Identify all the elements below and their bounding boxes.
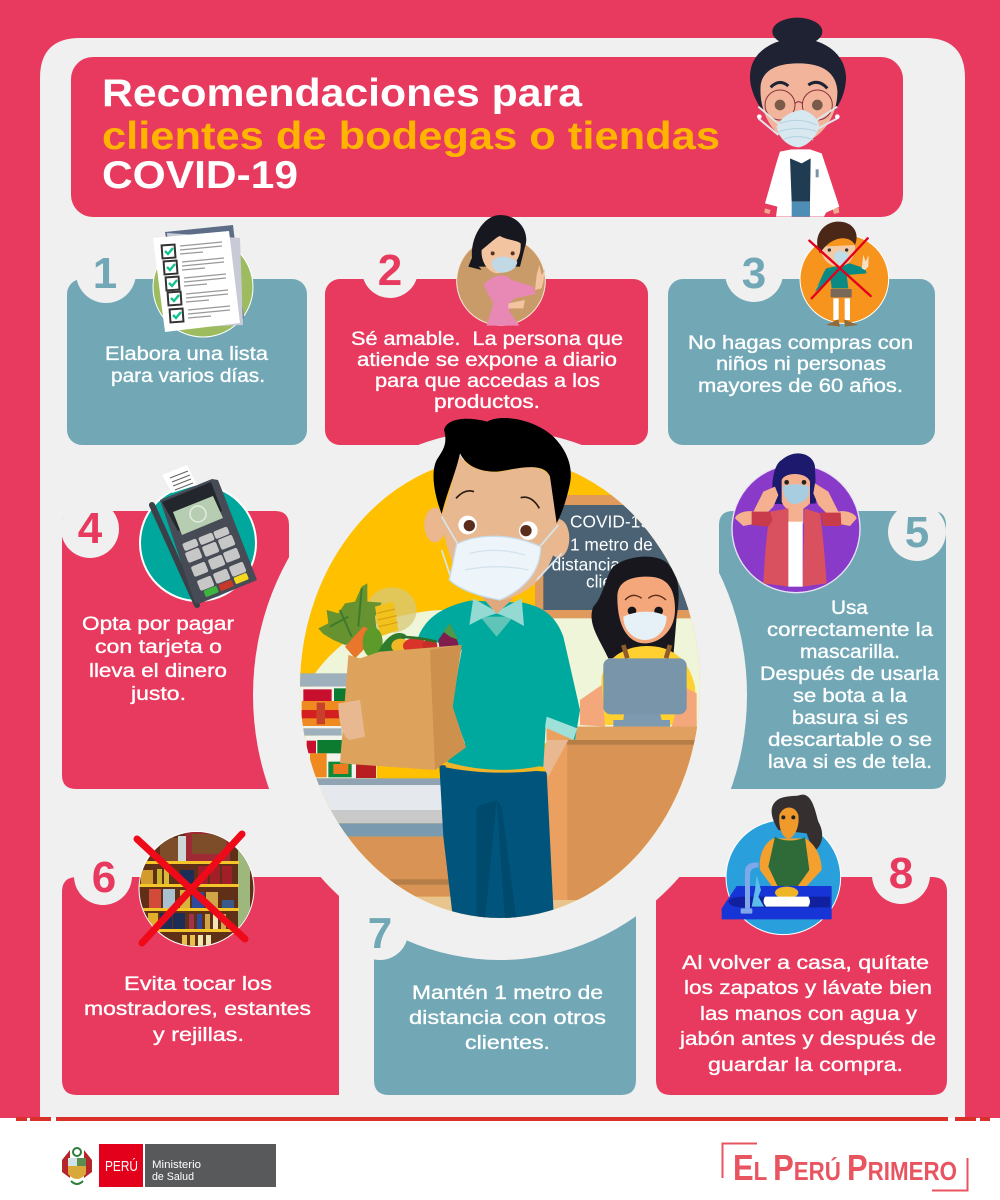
cashier <box>580 557 697 727</box>
badge 5 <box>888 503 946 561</box>
icon: store shelves crossed out <box>137 831 255 947</box>
text: step 4: con tarjeta o <box>95 637 222 658</box>
face mask <box>442 517 562 600</box>
logo: Ministerio de Salud <box>62 1144 276 1187</box>
badge 8: 8 <box>889 849 913 898</box>
text: step 5: basura si es <box>792 708 908 729</box>
text: step 8: las manos con agua y <box>700 1004 918 1025</box>
store wall <box>315 610 710 743</box>
text: step 4: Opta por pagar <box>82 614 235 635</box>
badge 7: 7 <box>368 909 392 958</box>
chalkboard sign: 1 metro de <box>570 535 653 555</box>
text: step 1: para varios días. <box>111 366 265 387</box>
text: step 5: lava si es de tela. <box>768 752 932 773</box>
chalkboard sign: distancia <box>552 555 620 575</box>
chalkboard sign: COVID-19 <box>570 511 650 531</box>
text: step 8 <box>679 953 936 1076</box>
panel: step 2 <box>325 279 648 445</box>
title text <box>102 72 720 197</box>
grocery bag <box>340 645 466 770</box>
text: step 1 <box>105 344 268 387</box>
text: step 8: guardar la compra. <box>708 1055 903 1076</box>
text: step 5: Usa <box>831 598 868 619</box>
text: step 7: Mantén 1 metro de <box>412 983 603 1004</box>
text: step 7 <box>409 983 606 1054</box>
icon: card terminal <box>140 465 257 605</box>
title text: Recomendaciones para <box>102 72 582 115</box>
icon: kind woman <box>457 215 545 326</box>
logo: Ministerio de Salud: Ministerio <box>152 1159 201 1171</box>
badge 2 <box>362 242 418 298</box>
logo: El Perú Primero: EL PERÚ PRIMERO <box>733 1147 957 1188</box>
hand <box>338 700 365 740</box>
badge 7 <box>352 904 408 960</box>
badge 4 <box>61 500 119 558</box>
eyes <box>456 491 539 540</box>
text: step 4: justo. <box>130 684 186 705</box>
text: step 5: correctamente la <box>767 620 933 641</box>
icon: boy crossed out <box>800 222 889 327</box>
badge 1 <box>76 243 136 303</box>
text: step 1: Elabora una lista <box>105 344 268 365</box>
badge 6 <box>74 847 132 905</box>
text: step 6 <box>84 974 311 1046</box>
badge 6: 6 <box>92 853 116 902</box>
icon: checklist <box>153 225 253 337</box>
badge 4: 4 <box>78 504 103 553</box>
panel: step 6 <box>62 877 339 1095</box>
text: step 4 <box>82 614 235 705</box>
panel: step 7 <box>374 900 636 1095</box>
text: step 5 <box>760 598 939 773</box>
store counter <box>547 727 713 900</box>
logo: Ministerio de Salud: de Salud <box>152 1171 194 1183</box>
text: step 8: los zapatos y lávate bien <box>684 978 932 999</box>
cold counter <box>316 778 577 918</box>
text: step 2: productos. <box>434 392 540 413</box>
icon: handwashing <box>722 795 841 935</box>
chalkboard sign: clientes <box>586 571 645 591</box>
left shelves <box>300 673 377 778</box>
badge 1: 1 <box>93 249 117 298</box>
collar <box>469 597 524 637</box>
main illustration: store background <box>290 450 713 930</box>
panel: step 5 <box>719 511 946 789</box>
text: step 2: para que accedas a los <box>375 371 600 392</box>
jeans <box>439 765 554 922</box>
text: step 8: jabón antes y después de <box>679 1029 936 1050</box>
text: step 3: mayores de 60 años. <box>698 376 903 397</box>
text: step 5: se bota a la <box>793 686 907 707</box>
panel: step 8 <box>656 877 947 1095</box>
icon: person adjusting mask <box>732 453 860 593</box>
text: step 3: niños ni personas <box>716 354 886 375</box>
panel: step 4 <box>62 511 289 789</box>
chalkboard sign <box>535 495 708 618</box>
text: step 2 <box>351 329 623 413</box>
vegetables <box>318 583 458 658</box>
text: step 2: Sé amable. La persona que <box>351 329 623 350</box>
hair <box>434 418 571 523</box>
logo: Ministerio de Salud: PERÚ <box>105 1158 138 1175</box>
text: step 6: Evita tocar los <box>124 974 272 995</box>
ears <box>424 508 569 558</box>
face <box>442 455 558 600</box>
text: step 8: Al volver a casa, quítate <box>682 953 929 974</box>
icon: coat of arms <box>62 1148 92 1184</box>
badge 8 <box>872 846 930 904</box>
sweater <box>418 601 580 773</box>
central cut-out circle <box>253 430 747 960</box>
text: step 5: mascarilla. <box>800 642 900 663</box>
text: step 6: mostradores, estantes <box>84 999 311 1020</box>
text: step 3: No hagas compras con <box>688 333 913 354</box>
badge 5: 5 <box>905 508 929 557</box>
title text: clientes de bodegas o tiendas <box>102 115 720 158</box>
text: step 6: y rejillas. <box>153 1025 244 1046</box>
panel: step 3 <box>668 279 935 445</box>
text: step 3 <box>688 333 913 397</box>
text: step 2: atiende se expone a diario <box>357 350 617 371</box>
doctor character <box>750 18 846 217</box>
badge 2: 2 <box>378 246 402 295</box>
text: step 5: descartable o se <box>768 730 932 751</box>
text: step 4: lleva el dinero <box>89 661 227 682</box>
title text: COVID-19 <box>102 154 298 197</box>
title banner <box>71 57 903 217</box>
text: step 7: distancia con otros <box>409 1008 606 1029</box>
badge 3: 3 <box>742 249 766 298</box>
panel: step 1 <box>67 279 307 445</box>
shopper figure <box>318 418 580 922</box>
text: step 7: clientes. <box>465 1033 550 1054</box>
text: step 5: Después de usarla <box>760 664 939 685</box>
badge 3 <box>725 244 783 302</box>
